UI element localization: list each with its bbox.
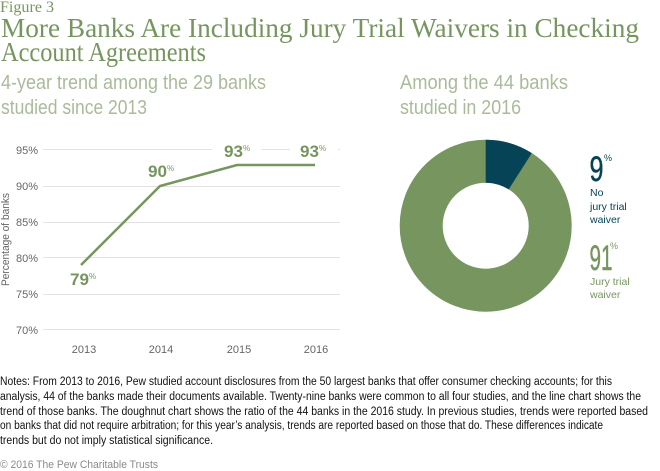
y axis title: Percentage of banks bbox=[0, 193, 12, 286]
x axis labels: 2016 bbox=[304, 344, 328, 356]
legend: jury trial waiver: waiver bbox=[589, 289, 621, 301]
data label 93% 2015: 93 bbox=[224, 142, 243, 161]
legend: no jury trial waiver: waiver bbox=[589, 214, 621, 226]
subheading: doughnut chart bbox=[400, 72, 568, 119]
title: More Banks Are Including Jury Trial Waivers in Checking bbox=[1, 13, 639, 43]
segment: jury trial waiver 91% bbox=[421, 161, 550, 290]
legend: no jury trial waiver: No bbox=[590, 187, 604, 199]
trend line bbox=[81, 165, 315, 265]
segment: no jury trial waiver 9% bbox=[486, 140, 532, 189]
line chart bbox=[0, 142, 340, 356]
y axis labels: 90% bbox=[16, 181, 38, 193]
notes: trends but do not imply statistical significance. bbox=[0, 435, 213, 447]
data label 79%: 79 bbox=[70, 270, 89, 289]
x axis labels: 2015 bbox=[227, 344, 251, 356]
y axis labels: 85% bbox=[16, 217, 38, 229]
data label 93% 2016: % bbox=[319, 144, 326, 153]
data label 90%: % bbox=[167, 164, 174, 173]
legend: no jury trial waiver bbox=[589, 150, 627, 226]
data label 79%: % bbox=[89, 272, 96, 281]
legend: jury trial waiver: Jury trial bbox=[590, 276, 630, 288]
y axis labels bbox=[16, 145, 38, 337]
legend: no jury trial waiver: 9 bbox=[590, 150, 604, 189]
subheading: line chart: 4-year trend among the 29 banks bbox=[1, 72, 266, 94]
data label 90%: 90 bbox=[148, 162, 167, 181]
legend: jury trial waiver bbox=[589, 239, 630, 301]
y axis labels: 80% bbox=[16, 253, 38, 265]
notes bbox=[0, 376, 648, 447]
legend: jury trial waiver: 91 bbox=[590, 239, 612, 278]
y axis labels: 70% bbox=[16, 325, 38, 337]
data label 93% 2016: 93 bbox=[300, 142, 319, 161]
subheading: doughnut chart: Among the 44 banks bbox=[400, 72, 568, 94]
data label 93% 2015: % bbox=[243, 144, 250, 153]
subheading: line chart: studied since 2013 bbox=[1, 97, 147, 119]
title bbox=[1, 13, 639, 67]
copyright: © 2016 The Pew Charitable Trusts bbox=[0, 459, 158, 471]
legend: jury trial waiver: % bbox=[610, 241, 618, 251]
x axis labels bbox=[72, 344, 328, 356]
y axis labels: 75% bbox=[16, 289, 38, 301]
y axis labels: 95% bbox=[16, 145, 38, 157]
subheading: line chart bbox=[1, 72, 266, 119]
x axis labels: 2013 bbox=[72, 344, 96, 356]
subheading: doughnut chart: studied in 2016 bbox=[400, 97, 521, 119]
x axis labels: 2014 bbox=[149, 344, 173, 356]
legend: no jury trial waiver: % bbox=[604, 153, 612, 163]
title: Account Agreements bbox=[1, 37, 206, 67]
legend: no jury trial waiver: jury trial bbox=[589, 201, 627, 213]
doughnut chart bbox=[421, 140, 550, 290]
